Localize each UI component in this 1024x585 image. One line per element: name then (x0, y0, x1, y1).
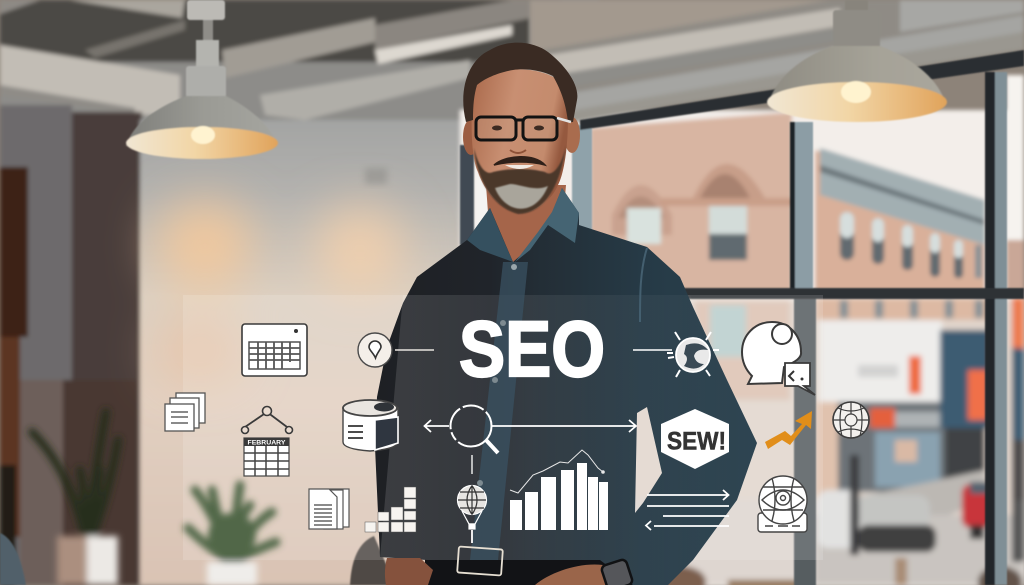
chin grey (495, 184, 548, 209)
eyes (492, 126, 544, 130)
beard (474, 145, 566, 214)
window background (460, 110, 1024, 585)
shirt placket (470, 262, 528, 560)
nose shadow (510, 150, 526, 153)
icon: file pages (309, 489, 349, 529)
shoulder seam (640, 248, 647, 322)
chair: left edge (0, 533, 26, 585)
icon: hanger table (242, 406, 292, 476)
arches (612, 185, 672, 235)
icon: calendar (242, 324, 307, 376)
buttons (477, 264, 517, 486)
translucent panel (183, 295, 823, 560)
hair (463, 43, 577, 122)
light wall (140, 120, 465, 585)
bar chart (510, 450, 608, 530)
neck (486, 185, 566, 262)
left dark wall (0, 105, 72, 585)
head (472, 69, 568, 213)
icon: arrow lines (646, 490, 729, 530)
collar (467, 208, 513, 262)
chair: behind person (350, 536, 395, 585)
connector line: pin to SEO (395, 349, 434, 351)
icon: chat bubbles (742, 322, 815, 395)
icon: document stack (165, 393, 205, 431)
person (375, 43, 757, 585)
watch (601, 559, 633, 585)
ears (463, 119, 479, 155)
shirt overlay band (380, 295, 757, 585)
right hand (535, 564, 610, 585)
glasses (476, 117, 571, 140)
icon: sun globe (633, 332, 719, 377)
icon: staircase bars (365, 487, 416, 532)
icon: globe balloon (458, 486, 486, 543)
icon: magnifier with arrows (424, 406, 636, 474)
icon: belt buckle frame (457, 546, 503, 576)
upper right ceiling (530, 0, 1024, 130)
wall lights (155, 200, 405, 385)
icon: SEW badge (661, 409, 729, 469)
diagram icons (165, 304, 869, 576)
cars (818, 490, 860, 548)
left hand (385, 558, 433, 585)
window frames (460, 50, 1024, 585)
lamp: left pendant (126, 0, 278, 159)
icon: webcam globe (758, 476, 807, 532)
icon: location pin (358, 333, 392, 367)
shirt (375, 188, 757, 585)
icon: database (343, 400, 398, 451)
icon: SEW badge: SEW! (667, 428, 726, 456)
lamp: right pendant (767, 0, 947, 122)
icon: hanger table: FEBRUARY (248, 440, 286, 446)
trousers (425, 555, 640, 585)
icon: orange growth arrow (765, 411, 812, 449)
icon: globe (833, 402, 869, 438)
SEO title: SEO (459, 304, 605, 393)
plant: small potted (188, 485, 276, 585)
moustache (494, 157, 545, 165)
street view (590, 298, 1024, 585)
plant: left potted (32, 412, 118, 585)
